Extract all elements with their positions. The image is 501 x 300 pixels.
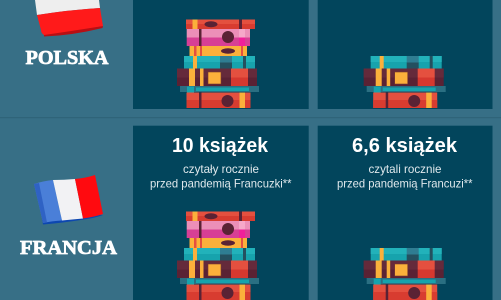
icon: tall book stack [177, 212, 259, 300]
panel: Polish women [133, 0, 309, 109]
heading: 6,6 books: 6,6 książek [352, 135, 458, 157]
heading: 10 books: 10 książek [172, 135, 269, 157]
text: French women description: czytały rocznie [183, 162, 259, 176]
flag: Poland [35, 0, 103, 36]
flag: France [34, 175, 103, 224]
icon: tall book stack [177, 20, 259, 108]
text: French women description: przed pandemią Francuzki** [150, 176, 292, 190]
text: French men description: czytali rocznie [368, 162, 442, 176]
icon: short book stack [364, 56, 446, 108]
panel: Polish men [318, 0, 492, 109]
text: French men description [337, 162, 473, 190]
panel: French men [318, 126, 492, 300]
icon: short book stack [364, 248, 446, 300]
text: French women description [150, 162, 292, 190]
heading: Francja: FRANCJA [20, 237, 117, 259]
panel: French women [133, 126, 309, 300]
heading: Polska: POLSKA [26, 47, 109, 69]
text: French men description: przed pandemią Francuzi** [337, 176, 473, 190]
